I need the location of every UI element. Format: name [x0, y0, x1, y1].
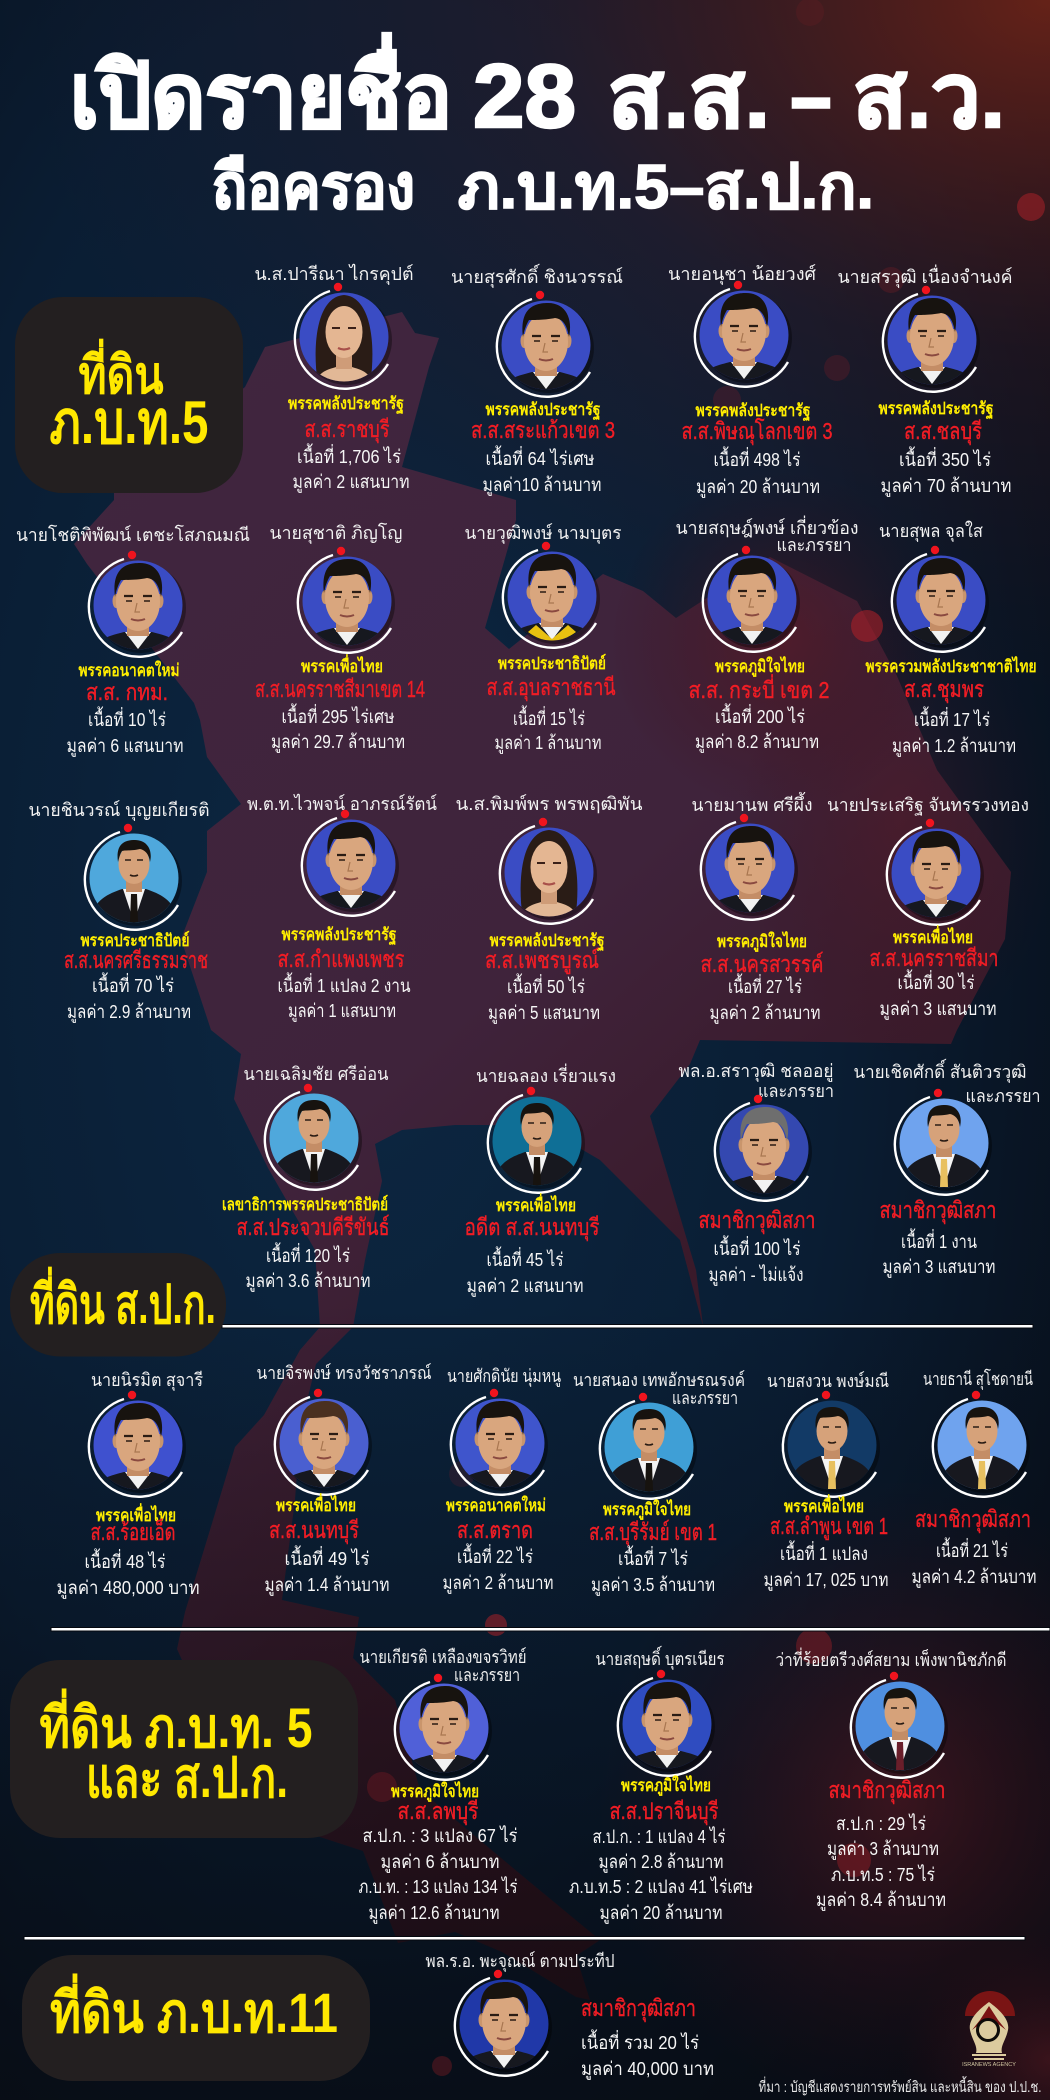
seat: อดีต ส.ส.นนทบุรี: [464, 1214, 600, 1241]
photo: [395, 1674, 492, 1780]
seat: ส.ส.เพชรบูรณ์: [485, 947, 599, 974]
person 13: นายมานพ ศรีผึ้ง: [692, 792, 812, 815]
section badge: ส.ป.ก.: ที่ดิน ส.ป.ก.: [30, 1266, 216, 1335]
title line 1: เปิดรายชื่อ: [70, 33, 452, 147]
land area: เนื้อที่ 64 ไร่เศษ: [486, 445, 594, 469]
person 27: [776, 1647, 1006, 1911]
land area: เนื้อที่ 27 ไร่: [728, 973, 802, 997]
person 5: นายโชติพิพัฒน์ เตชะโสภณมณี: [16, 524, 250, 545]
person 14: นายประเสริฐ จันทรรวงทอง: [827, 795, 1029, 816]
title line 1: –: [790, 47, 832, 147]
land area: เนื้อที่ 295 ไร่เศษ: [282, 703, 394, 727]
seat: ส.ส.นนทบุรี: [269, 1517, 359, 1544]
party: พรรคอนาคตใหม่: [78, 660, 180, 680]
value: มูลค่า 3.6 ล้านบาท: [246, 1270, 370, 1292]
seat: ส.ส.นครราชสีมา: [870, 945, 998, 971]
party: พรรคพลังประชารัฐ: [288, 394, 404, 415]
party: พรรคภูมิใจไทย: [715, 656, 805, 678]
photo: [703, 546, 800, 652]
land area: เนื้อที่ 120 ไร่: [266, 1242, 350, 1266]
person 6: นายสุชาติ ภิญโญ: [270, 522, 402, 544]
value: มูลค่า 6 แสนบาท: [66, 735, 184, 757]
photo: [265, 1084, 362, 1190]
land area: เนื้อที่ 350 ไร่: [899, 446, 991, 470]
person 18: [854, 1058, 1040, 1278]
land area: เนื้อที่ 30 ไร่: [898, 969, 975, 993]
title: [70, 33, 1005, 222]
land area: เนื้อที่ 50 ไร่: [507, 973, 585, 997]
title line 2: ภ.บ.ท.5–ส.ป.ก.: [458, 153, 874, 222]
person 10: [28, 800, 210, 1023]
value: มูลค่า 2 ล้านบาท: [710, 1002, 820, 1024]
photo: [497, 291, 594, 397]
land details: มูลค่า 6 ล้านบาท: [380, 1851, 500, 1873]
land area: เนื้อที่ รวม 20 ไร่: [581, 2029, 699, 2053]
section rule: ส.ป.ก.: [222, 1324, 1033, 1328]
land details: ส.ป.ก : 29 ไร่: [836, 1813, 926, 1834]
person 2: [451, 263, 623, 496]
section badge: ภ.บ.ท.5 และ ส.ป.ก.: [10, 1660, 358, 1838]
seat: สมาชิกวุฒิสภา: [828, 1777, 946, 1804]
value: มูลค่า 2.9 ล้านบาท: [67, 1001, 191, 1023]
land details: ภ.บ.ท. : 13 แปลง 134 ไร่: [358, 1876, 518, 1897]
land area: เนื้อที่ 10 ไร่: [88, 706, 166, 730]
land details: มูลค่า 2.8 ล้านบาท: [598, 1851, 724, 1873]
value: มูลค่า 2 แสนบาท: [466, 1275, 584, 1297]
value: มูลค่า10 ล้านบาท: [482, 474, 602, 496]
party: พรรคพลังประชารัฐ: [282, 925, 396, 946]
seat: สมาชิกวุฒิสภา: [698, 1207, 816, 1234]
person 25: [358, 1647, 526, 1924]
value: มูลค่า - ไม่แจ้ง: [708, 1264, 804, 1286]
value: มูลค่า 2 ล้านบาท: [442, 1572, 554, 1594]
photo: [887, 819, 984, 925]
person 6: [255, 522, 425, 753]
seat: ส.ส.ร้อยเอ็ด: [90, 1517, 176, 1545]
seat: ส.ส.ชุมพร: [904, 676, 984, 703]
land area: เนื้อที่ 498 ไร่: [714, 446, 801, 470]
person 9: [866, 520, 1036, 757]
person 12: น.ส.พิมพ์พร พรพฤฒิพัน: [456, 794, 642, 814]
section badge: ภ.บ.ท.5: [15, 297, 243, 493]
person 19: [56, 1370, 203, 1599]
photo: [783, 1391, 880, 1497]
photo: [275, 1389, 372, 1495]
land area: เนื้อที่ 1,706 ไร่: [297, 443, 401, 467]
party: พรรคพลังประชารัฐ: [486, 400, 600, 421]
land area: เนื้อที่ 49 ไร่: [284, 1545, 370, 1569]
spouse note: และภรรยา: [672, 1388, 738, 1408]
land area: เนื้อที่ 7 ไร่: [618, 1545, 688, 1569]
photo: [715, 1095, 812, 1201]
seat: ส.ส.ลพบุรี: [398, 1798, 478, 1825]
photo: [488, 1087, 585, 1193]
land area: เนื้อที่ 21 ไร่: [936, 1537, 1008, 1561]
value: มูลค่า 3 แสนบาท: [882, 1256, 996, 1278]
person 17: [678, 1061, 834, 1286]
person 15: นายเฉลิมชัย ศรีอ่อน: [244, 1064, 388, 1084]
title line 1: 28: [473, 47, 576, 147]
person 4: [838, 264, 1012, 497]
land area: เนื้อที่ 17 ไร่: [914, 706, 990, 730]
person 1: [254, 263, 414, 493]
person 3: [668, 264, 832, 498]
seat: ส.ส.บุรีรัมย์ เขต 1: [589, 1519, 717, 1546]
value: มูลค่า 1.2 ล้านบาท: [892, 735, 1016, 757]
photo: [933, 1391, 1030, 1497]
person 16: [464, 1063, 616, 1297]
land details: [816, 1813, 946, 1911]
person 20: [256, 1363, 432, 1596]
person 25: นายเกียรติ เหลืองขจรวิทย์: [360, 1647, 526, 1667]
party: พรรคพลังประชารัฐ: [490, 931, 604, 952]
seat: ส.ส.สระแก้วเขต 3: [471, 417, 615, 443]
photo: [701, 814, 798, 920]
land details: มูลค่า 3 ล้านบาท: [827, 1838, 939, 1860]
section badge: ภ.บ.ท.11: [22, 1955, 370, 2081]
seat: ส.ส.ราชบุรี: [304, 416, 390, 443]
person 21: นายศักดินัย นุ่มหนู: [447, 1366, 561, 1387]
party: เลขาธิการพรรคประชาธิปัตย์: [222, 1194, 388, 1214]
person 4: นายสรวุฒิ เนื่องจำนงค์: [838, 264, 1012, 288]
land area: เนื้อที่ 45 ไร่: [486, 1246, 564, 1270]
section badge: ภ.บ.ท.5: ที่ดิน: [78, 339, 164, 405]
value: มูลค่า 1 ล้านบาท: [494, 732, 602, 754]
person 23: [764, 1371, 889, 1591]
value: มูลค่า 1 แสนบาท: [288, 1000, 396, 1022]
person 8: นายสฤษฎ์พงษ์ เกี่ยวข้อง: [676, 515, 858, 538]
person 9: นายสุพล จุลใส: [879, 520, 983, 542]
value: มูลค่า 40,000 บาท: [581, 2058, 714, 2080]
party: พรรคอนาคตใหม่: [446, 1495, 546, 1515]
section rule: ภ.บ.ท.11: [24, 1936, 1025, 1940]
person 12: [456, 794, 642, 1024]
person 26: [569, 1645, 753, 1924]
land details: ภ.บ.ท.5 : 75 ไร่: [831, 1864, 935, 1885]
photo: [618, 1670, 715, 1776]
seat: ส.ส.พิษณุโลกเขต 3: [682, 418, 832, 445]
seat: ส.ส.อุบลราชธานี: [486, 674, 616, 701]
person 28: [426, 1951, 714, 2080]
seat: ส.ส.นครสวรรค์: [700, 951, 824, 977]
person 23: นายสงวน พงษ์มณี: [767, 1371, 889, 1391]
section badge: ภ.บ.ท.11: ที่ดิน ภ.บ.ท.11: [50, 1973, 338, 2044]
photo: [892, 546, 989, 652]
section badge: ภ.บ.ท.5: ภ.บ.ท.5: [50, 389, 208, 456]
photo: [455, 1970, 552, 2076]
spouse note: และภรรยา: [776, 535, 852, 555]
title line 1: ส.ว.: [853, 47, 1005, 147]
person 22: [573, 1370, 745, 1596]
land area: เนื้อที่ 1 แปลง 2 งาน: [278, 972, 411, 996]
section badge: ภ.บ.ท.5 และ ส.ป.ก.: ที่ดิน ภ.บ.ท. 5: [40, 1688, 312, 1759]
person 8: [676, 515, 858, 753]
person 27: ว่าที่ร้อยตรีวงศ์สยาม เพ็งพานิชภักดี: [776, 1647, 1006, 1670]
person 3: นายอนุชา น้อยวงศ์: [668, 264, 817, 285]
person 10: นายชินวรณ์ บุญยเกียรติ: [28, 800, 210, 821]
photo: [85, 824, 182, 930]
photo: [883, 286, 980, 392]
person 11: [247, 793, 437, 1022]
section badge: ภ.บ.ท.5 และ ส.ป.ก.: และ ส.ป.ก.: [86, 1746, 288, 1809]
party: พรรคเพื่อไทย: [784, 1494, 864, 1516]
seat: ส.ส.ปราจีนบุรี: [610, 1798, 718, 1825]
land area: เนื้อที่ 1 แปลง: [780, 1540, 868, 1564]
photo: [895, 1089, 992, 1195]
party: พรรคเพื่อไทย: [96, 1503, 176, 1525]
land details: มูลค่า 12.6 ล้านบาท: [368, 1902, 500, 1924]
photo: [295, 283, 392, 389]
title line 1: [70, 33, 1005, 147]
seat: ส.ส. กระบี่ เขต 2: [688, 674, 830, 703]
photo: [500, 818, 597, 924]
person 16: นายฉลอง เรี่ยวแรง: [476, 1063, 616, 1086]
land area: เนื้อที่ 100 ไร่: [714, 1235, 801, 1259]
value: มูลค่า 3.5 ล้านบาท: [591, 1574, 715, 1596]
value: มูลค่า 1.4 ล้านบาท: [264, 1574, 390, 1596]
land details: มูลค่า 8.4 ล้านบาท: [816, 1889, 946, 1911]
party: พรรคภูมิใจไทย: [717, 931, 807, 953]
person 15: [222, 1064, 390, 1292]
person 28: พล.ร.อ. พะจุณณ์ ตามประทีป: [426, 1951, 614, 1972]
land details: ส.ป.ก. : 3 แปลง 67 ไร่: [362, 1825, 518, 1846]
person 22: นายสนอง เทพอักษรณรงค์: [573, 1370, 745, 1390]
seat: ส.ส.ตราด: [457, 1517, 533, 1543]
party: พรรคเพื่อไทย: [301, 654, 383, 676]
value: มูลค่า 3 แสนบาท: [880, 998, 996, 1020]
logo: Isranews Agency: [962, 1991, 1016, 2068]
party: พรรคภูมิใจไทย: [621, 1775, 711, 1797]
value: มูลค่า 480,000 บาท: [56, 1577, 200, 1599]
person 11: พ.ต.ท.ไวพจน์ อาภรณ์รัตน์: [247, 793, 437, 814]
seat: สมาชิกวุฒิสภา: [581, 1995, 696, 2022]
person 5: [16, 524, 250, 757]
land details: ภ.บ.ท.5 : 2 แปลง 41 ไร่เศษ: [569, 1876, 753, 1897]
seat: สมาชิกวุฒิสภา: [880, 1197, 996, 1224]
person 26: นายสฤษดิ์ บุตรเนียร: [596, 1645, 725, 1670]
land details: มูลค่า 20 ล้านบาท: [600, 1902, 722, 1924]
photo: [851, 1672, 948, 1778]
land area: เนื้อที่ 22 ไร่: [457, 1543, 533, 1567]
person 13: [692, 792, 824, 1024]
seat: ส.ส.กำแพงเพชร: [278, 946, 404, 972]
photo: [89, 1391, 186, 1497]
person 1: น.ส.ปารีณา ไกรคุปต์: [254, 263, 414, 285]
person 18: นายเชิดศักดิ์ สันติวรวุฒิ: [854, 1058, 1026, 1083]
logo: Isranews Agency: ISRANEWS AGENCY: [962, 2062, 1016, 2068]
person 2: นายสุรศักดิ์ ชิงนวรรณ์: [451, 263, 623, 288]
spouse note: และภรรยา: [758, 1081, 834, 1101]
photo: [298, 547, 395, 653]
party: พรรคเพื่อไทย: [276, 1493, 356, 1515]
value: มูลค่า 17, 025 บาท: [764, 1569, 888, 1591]
land area: เนื้อที่ 48 ไร่: [84, 1548, 166, 1572]
land details: [569, 1826, 753, 1924]
seat: ส.ส.ชลบุรี: [904, 418, 982, 445]
seat: ส.ส.นครศรีธรรมราช: [64, 947, 208, 973]
land details: ส.ป.ก. : 1 แปลง 4 ไร่: [592, 1826, 726, 1847]
seat: ส.ส.ลำพูน เขต 1: [770, 1513, 888, 1540]
party: พรรคภูมิใจไทย: [603, 1499, 691, 1521]
value: มูลค่า 2 แสนบาท: [292, 471, 410, 493]
photo: [302, 810, 399, 916]
seat: ส.ส.ประจวบคีรีขันธ์: [236, 1214, 390, 1240]
title line 1: ส.ส.: [608, 47, 770, 147]
person 7: นายวุฒิพงษ์ นามบุตร: [464, 523, 622, 544]
party: พรรคเพื่อไทย: [893, 925, 973, 947]
photo: [451, 1389, 548, 1495]
person 21: [442, 1366, 561, 1594]
person 14: [827, 795, 1029, 1020]
land details: [358, 1825, 518, 1924]
person 7: [464, 523, 622, 754]
land area: เนื้อที่ 15 ไร่: [513, 705, 585, 729]
person 17: พล.อ.สราวุฒิ ชลออยู่: [678, 1061, 834, 1082]
party: พรรคพลังประชารัฐ: [696, 401, 810, 422]
photo: [89, 551, 186, 657]
party: พรรคเพื่อไทย: [496, 1193, 576, 1215]
land area: เนื้อที่ 200 ไร่: [715, 703, 805, 727]
section badge: ส.ป.ก.: [10, 1253, 226, 1356]
photo: [695, 281, 792, 387]
party: พรรคประชาธิปัตย์: [80, 930, 190, 950]
title line 2: [212, 153, 874, 222]
person 19: นายนิรมิต สุจารี: [91, 1370, 203, 1391]
value: มูลค่า 29.7 ล้านบาท: [271, 731, 405, 753]
spouse note: และภรรยา: [454, 1665, 520, 1685]
party: พรรคพลังประชารัฐ: [878, 399, 994, 420]
value: มูลค่า 8.2 ล้านบาท: [695, 731, 819, 753]
title line 2: ถือครอง: [212, 153, 415, 222]
person 20: นายจิรพงษ์ ทรงวัชราภรณ์: [256, 1363, 432, 1383]
land area: เนื้อที่ 1 งาน: [901, 1228, 977, 1252]
value: มูลค่า 5 แสนบาท: [488, 1002, 600, 1024]
seat: ส.ส.นครราชสีมาเขต 14: [255, 676, 425, 702]
party: พรรคประชาธิปัตย์: [498, 653, 606, 673]
value: มูลค่า 70 ล้านบาท: [880, 475, 1012, 497]
spouse note: และภรรยา: [966, 1086, 1040, 1106]
seat: ส.ส. กทม.: [86, 679, 168, 705]
person 24: [912, 1368, 1036, 1588]
party: พรรคภูมิใจไทย: [391, 1781, 479, 1803]
value: มูลค่า 20 ล้านบาท: [696, 476, 820, 498]
section rule: ภ.บ.ท.5 และ ส.ป.ก.: [51, 1628, 1050, 1631]
land area: เนื้อที่ 70 ไร่: [92, 972, 174, 996]
photo: [503, 542, 600, 648]
photo: [600, 1393, 697, 1499]
